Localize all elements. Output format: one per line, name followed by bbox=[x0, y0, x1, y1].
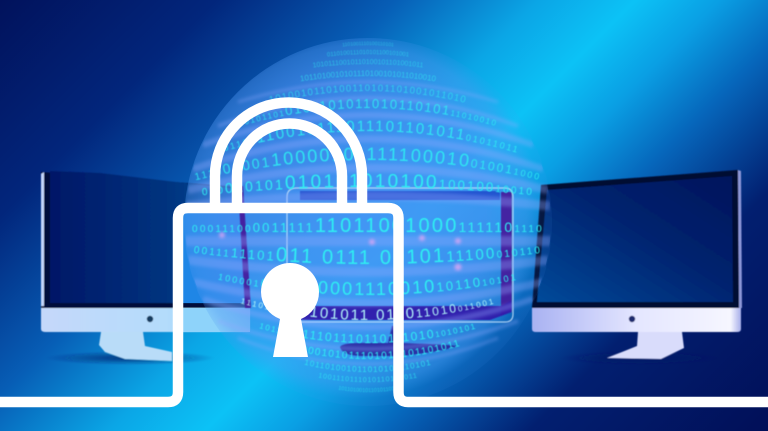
monitor camera dot bbox=[147, 316, 153, 322]
binary digit rows: 1011010010101110100101011010010 bbox=[300, 70, 436, 82]
binary digit rows: 01001010101010101010010010010010 bbox=[202, 173, 532, 196]
globe disc bbox=[184, 38, 552, 406]
center monitor seen through globe bbox=[238, 186, 513, 356]
binary digit rows: 101101001011010100110101 bbox=[304, 359, 431, 372]
binary digit rows: 10101101010110101101011010111010010 bbox=[242, 98, 496, 126]
monitor stand bbox=[99, 332, 172, 361]
monitor edge highlight bbox=[738, 170, 742, 308]
binary digit rows: 1011000101011101010101101011 bbox=[306, 340, 460, 360]
monitor frame bbox=[41, 172, 250, 308]
binary globe bbox=[184, 38, 552, 397]
padlock inner shackle bbox=[237, 124, 342, 205]
bright area inside padlock over left monitor bbox=[183, 213, 250, 303]
padlock outer shackle bbox=[215, 102, 362, 205]
binary digit rows: 10101110010110100101101001011 bbox=[313, 58, 423, 68]
monitor screen bbox=[50, 171, 247, 303]
padlock bbox=[0, 102, 768, 402]
latitude bands bbox=[185, 82, 551, 364]
monitor chin bbox=[532, 308, 741, 332]
binary digit rows: 111011110101011 011011010011001 bbox=[240, 298, 494, 321]
purple bottom bezel bbox=[300, 300, 512, 320]
binary digit rows: 0011111101011 0111 0010111100010110 bbox=[194, 246, 540, 265]
binary digit rows: 1011010111011101101110101010101 bbox=[259, 323, 476, 344]
monitor stand bbox=[607, 332, 684, 359]
purple right bezel bbox=[501, 192, 512, 316]
binary digit rows: 1001110111010110101011 bbox=[318, 372, 417, 382]
monitor shadow bbox=[45, 351, 215, 365]
monitor screen bbox=[537, 176, 733, 302]
center monitor outline bbox=[287, 188, 513, 322]
purple left monitor edge bbox=[238, 186, 251, 308]
binary digit rows: 0110100111010101100101001 bbox=[326, 49, 408, 57]
binary digit rows: 10110100101101011010 bbox=[338, 386, 394, 392]
binary digit rows: 11100100110000101111100010010011000 bbox=[194, 147, 540, 180]
binary digit rows: 000111000011111110110010001111101110 bbox=[192, 218, 542, 233]
monitor edge highlight bbox=[41, 172, 44, 306]
binary digit rows: 10000101101100011100101011010101 bbox=[218, 274, 516, 296]
purple top bezel bbox=[300, 191, 500, 200]
right monitor bbox=[532, 170, 742, 365]
light chin area inside padlock bbox=[183, 308, 250, 332]
monitor chin bbox=[41, 308, 250, 332]
pink light specks bbox=[219, 232, 462, 270]
purple stand base bbox=[340, 326, 458, 356]
left monitor bbox=[41, 171, 250, 365]
binary digit rows: 1010010110100110101101001011010 bbox=[269, 84, 466, 103]
keyhole bbox=[261, 263, 319, 357]
monitor camera dot bbox=[629, 316, 635, 322]
binary digit rows bbox=[192, 41, 542, 392]
monitor frame bbox=[532, 170, 741, 308]
monitor shadow bbox=[560, 351, 720, 365]
binary digit rows: 10110111001011101110110101101011011 bbox=[225, 120, 517, 153]
padlock body outline extending to the page edges bbox=[0, 208, 768, 402]
binary digit rows: 1101001110100110101 bbox=[342, 41, 394, 47]
